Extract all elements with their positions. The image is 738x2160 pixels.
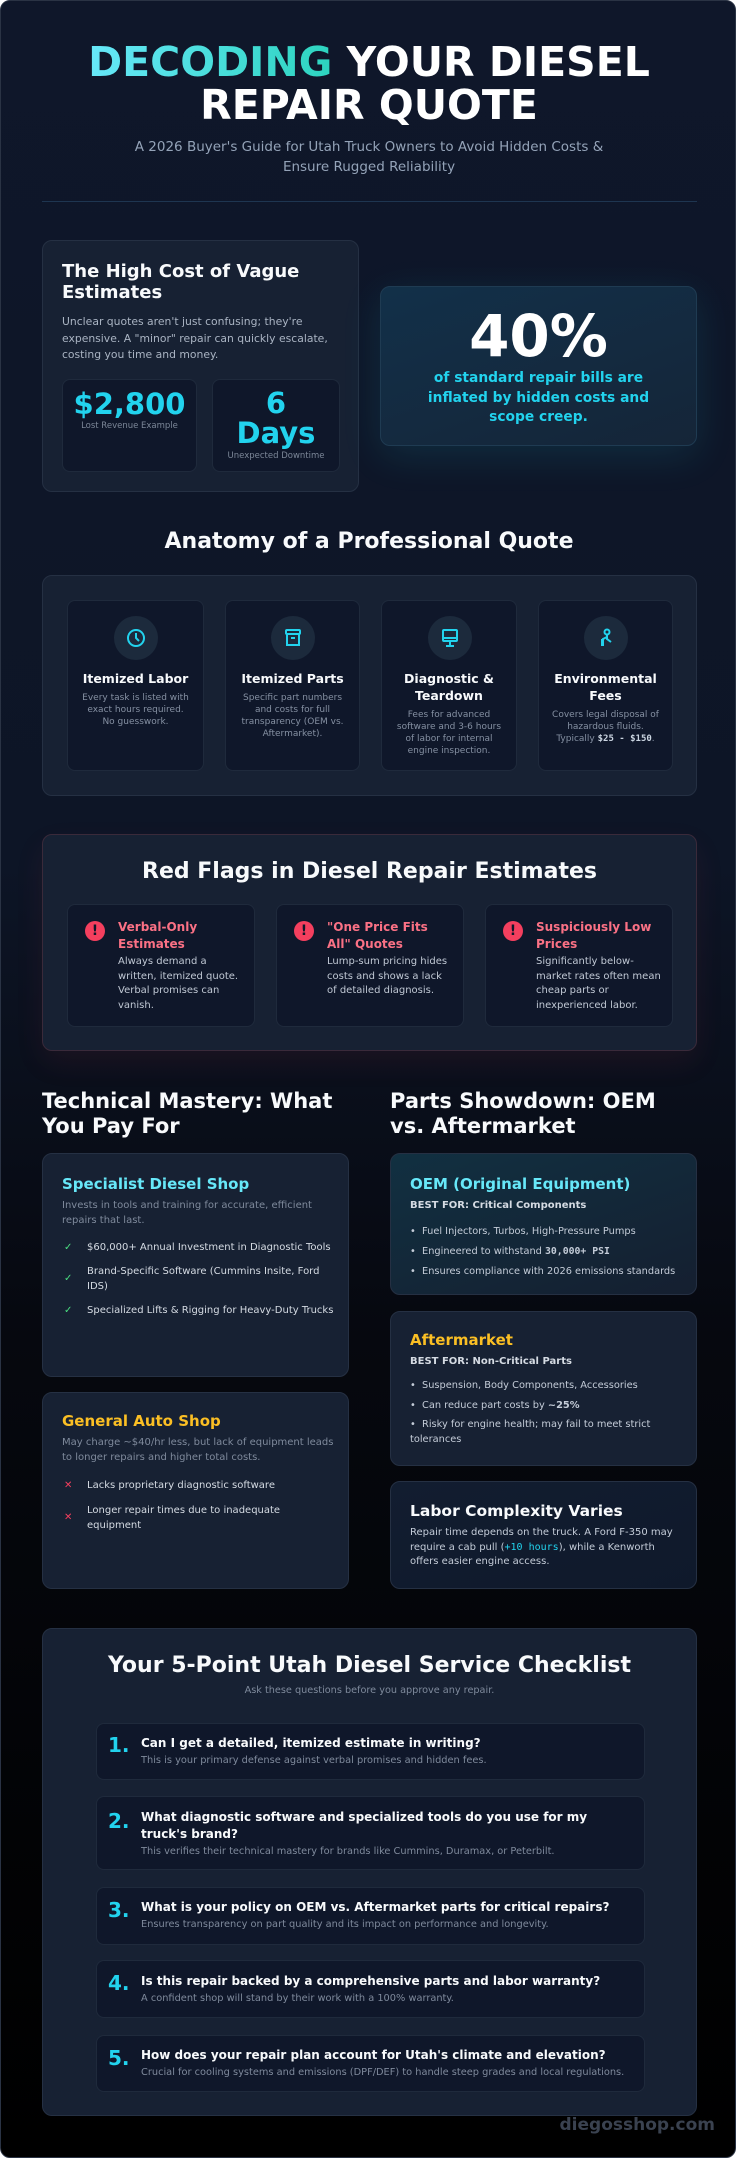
card: itemized parts: Aftermarket).: [263, 729, 322, 739]
cross items: [64, 1480, 280, 1530]
card: OEM: • Fuel Injectors, Turbos, High-Pressure Pumps: [410, 1226, 636, 1237]
card: verbal-only: [67, 904, 255, 1027]
card: diagnostic: Fees for advanced: [408, 710, 490, 720]
icon: clock: [114, 616, 158, 660]
card: one price: Lump-sum pricing hides: [327, 956, 447, 967]
card: specialist diesel shop: Invests in tools and training for accurate, efficient: [62, 1200, 312, 1211]
card: one price: of detailed diagnosis.: [327, 985, 434, 996]
card: diagnostic: Teardown: [415, 688, 483, 703]
card: verbal-only: Verbal-Only: [118, 920, 197, 934]
card: specialist diesel shop: repairs that last.: [62, 1214, 144, 1226]
item 1: [96, 1723, 645, 1780]
icon: alert: [503, 921, 523, 941]
card: OEM: OEM (Original Equipment): [410, 1175, 630, 1193]
stat: $2,800: $2,800: [74, 387, 185, 421]
card: labor complexity: offers easier engine access.: [410, 1556, 550, 1567]
subtitle: A 2026 Buyer's Guide for Utah Truck Owners to Avoid Hidden Costs &: [135, 139, 603, 155]
item 4: A confident shop will stand by their work with a 100% warranty.: [141, 1993, 454, 2004]
card: itemized labor: Itemized Labor: [83, 671, 188, 686]
checklist items: [64, 1242, 333, 1316]
card: OEM: [390, 1153, 697, 1295]
item 4: 4.: [108, 1971, 130, 1995]
item 3: 3.: [108, 1898, 130, 1922]
icon: alert: !: [510, 923, 516, 939]
checklist items: Brand-Specific Software (Cummins Insite, Ford: [87, 1266, 319, 1277]
panel: red flags: [42, 834, 697, 1051]
card: aftermarket: • Risky for engine health; may fail to meet strict: [410, 1419, 650, 1430]
subtitle: Ensure Rugged Reliability: [283, 159, 455, 175]
card: general auto shop: to longer repairs and higher total costs.: [62, 1452, 260, 1462]
heading: red flags: Red Flags in Diesel Repair Estimates: [142, 859, 597, 884]
checklist items: $60,000+ Annual Investment in Diagnostic Tools: [87, 1242, 331, 1253]
item 5: [96, 2035, 645, 2092]
card: specialist diesel shop: [42, 1153, 349, 1377]
card: diagnostic: Diagnostic &: [404, 671, 494, 686]
watermark: diegosshop.com: [560, 2115, 715, 2135]
heading: parts showdown: [390, 1089, 656, 1138]
card: environmental fees: hazardous fluids.: [567, 722, 644, 732]
card: aftermarket: tolerances: [410, 1434, 461, 1444]
heading: anatomy: Anatomy of a Professional Quote: [164, 529, 574, 554]
card: itemized labor: [67, 600, 204, 771]
card: diagnostic: software and 3-6 hours: [397, 722, 501, 732]
item 3: What is your policy on OEM vs. Aftermarket parts for critical repairs?: [141, 1900, 609, 1914]
card: diagnostic: engine inspection.: [408, 746, 490, 756]
card: itemized parts: transparency (OEM vs.: [241, 717, 344, 727]
card: itemized parts: [225, 600, 360, 771]
title: DECODING YOUR DIESEL: [88, 38, 650, 86]
icon: alert: [85, 921, 105, 941]
card: aftermarket: • Can reduce part costs by ~25%: [410, 1400, 580, 1410]
item 5: 5.: [108, 2046, 130, 2070]
icon: alert: [294, 921, 314, 941]
stat: $2,800: Lost Revenue Example: [81, 421, 178, 431]
card: environmental fees: Typically $25 - $150.: [556, 734, 655, 744]
cross items: ✕: [64, 1480, 72, 1491]
panel: anatomy: [42, 575, 697, 796]
card: labor complexity: Repair time depends on the truck. A Ford F-350 may: [410, 1527, 673, 1538]
icon: alert: !: [301, 923, 307, 939]
card: verbal-only: Verbal promises can: [118, 985, 219, 996]
card: low prices: inexperienced labor.: [536, 1000, 638, 1010]
card: aftermarket: [390, 1311, 697, 1466]
card: one price: All" Quotes: [327, 937, 403, 951]
card: OEM: BEST FOR: Critical Components: [410, 1200, 586, 1211]
card: specialist diesel shop: Specialist Diesel Shop: [62, 1175, 249, 1193]
item 4: Is this repair backed by a comprehensive parts and labor warranty?: [141, 1974, 600, 1988]
card: environmental fees: [538, 600, 673, 771]
panel heading: The High Cost of Vague Estimates: [62, 261, 299, 303]
cross items: ✕: [64, 1512, 72, 1523]
card: low prices: Prices: [536, 937, 577, 951]
card: general auto shop: May charge ~$40/hr less, but lack of equipment leads: [62, 1437, 334, 1448]
card: one price: costs and shows a lack: [327, 970, 442, 982]
callout: 40%: 40%: [469, 302, 608, 370]
card: general auto shop: [42, 1392, 349, 1589]
item 5: How does your repair plan account for Utah's climate and elevation?: [141, 2048, 606, 2062]
title: [88, 38, 650, 129]
card: aftermarket: • Suspension, Body Components, Accessories: [410, 1380, 638, 1391]
stat: 6 days: Unexpected Downtime: [228, 451, 324, 461]
checklist items: ✓: [64, 1242, 72, 1253]
card: itemized labor: exact hours required.: [87, 705, 184, 715]
card: low prices: Significantly below-: [536, 956, 634, 967]
panel body text: Unclear quotes aren't just confusing; they're expensive. A "minor" repair can quickly escalate, costing you time and money.: [62, 315, 328, 361]
checklist items: Specialized Lifts & Rigging for Heavy-Duty Trucks: [87, 1305, 333, 1316]
title: REPAIR QUOTE: [200, 81, 538, 129]
item 1: 1.: [108, 1733, 130, 1757]
card: environmental fees: Fees: [589, 688, 622, 703]
cross items: Longer repair times due to inadequate: [87, 1505, 280, 1516]
icon: box: [271, 616, 315, 660]
card: environmental fees: Covers legal disposal of: [552, 710, 659, 720]
card: itemized parts: and costs for full: [255, 705, 330, 715]
item 4: [96, 1960, 645, 2018]
item 3: Ensures transparency on part quality and its impact on performance and longevity.: [141, 1919, 549, 1930]
card: labor complexity: require a cab pull (+10 hours), while a Kenworth: [410, 1542, 655, 1552]
callout: 40%: of standard repair bills are inflated by hidden costs and scope creep.: [428, 370, 649, 425]
callout: 40%: [380, 286, 697, 446]
card: labor complexity: Labor Complexity Varies: [410, 1502, 623, 1520]
stat: 6 days: [212, 379, 340, 472]
stat: $2,800: [62, 379, 197, 472]
heading: technical mastery: Technical Mastery: What: [42, 1089, 332, 1113]
item 2: truck's brand?: [141, 1827, 238, 1841]
heading: checklist: Your 5-Point Utah Diesel Service Checklist: [108, 1653, 631, 1678]
card: one price: [276, 904, 464, 1027]
cross items: equipment: [87, 1520, 141, 1530]
item 1: Can I get a detailed, itemized estimate in writing?: [141, 1736, 481, 1750]
card: low prices: cheap parts or: [536, 985, 609, 996]
item 2: What diagnostic software and specialized tools do you use for my: [141, 1810, 587, 1824]
icon: alert: !: [92, 923, 98, 939]
card: diagnostic: of labor for internal: [405, 734, 493, 744]
item 2: 2.: [108, 1809, 130, 1833]
card: itemized labor: Every task is listed with: [82, 693, 189, 703]
subtitle: [134, 139, 603, 175]
card: low prices: Suspiciously Low: [536, 920, 651, 934]
card: itemized parts: Specific part numbers: [243, 693, 342, 703]
card: low prices: market rates often mean: [536, 970, 661, 982]
card: verbal-only: Always demand a: [118, 956, 207, 967]
heading: technical mastery: You Pay For: [42, 1114, 180, 1138]
card: verbal-only: written, itemized quote.: [118, 970, 238, 982]
item 3: [96, 1887, 645, 1945]
item 1: This is your primary defense against verbal promises and hidden fees.: [141, 1755, 487, 1766]
heading: parts showdown: Parts Showdown: OEM: [390, 1089, 656, 1113]
icon: person: [584, 616, 628, 660]
card: OEM: • Ensures compliance with 2026 emissions standards: [410, 1266, 675, 1277]
panel: checklist: Ask these questions before you approve any repair.: [245, 1685, 494, 1696]
item 2: This verifies their technical mastery for brands like Cummins, Duramax, or Peterbilt.: [141, 1846, 555, 1857]
item 5: Crucial for cooling systems and emissions (DPF/DEF) to handle steep grades and local regulations.: [141, 2067, 624, 2078]
card: verbal-only: vanish.: [118, 1000, 154, 1010]
card: labor complexity: [390, 1481, 697, 1589]
panel: checklist: [42, 1628, 697, 2116]
icon: monitor: [428, 616, 472, 660]
checklist items: ✓: [64, 1273, 72, 1284]
stat: 6 days: 6: [266, 386, 286, 420]
card: general auto shop: General Auto Shop: [62, 1412, 221, 1430]
card: environmental fees: Environmental: [554, 671, 657, 686]
card: itemized parts: Itemized Parts: [241, 671, 344, 686]
card: OEM: • Engineered to withstand 30,000+ PSI: [410, 1246, 610, 1257]
stat: 6 days: Days: [237, 416, 315, 450]
card: verbal-only: Estimates: [118, 937, 185, 951]
card: aftermarket: BEST FOR: Non-Critical Parts: [410, 1356, 572, 1367]
card: diagnostic: [381, 600, 517, 771]
cross items: Lacks proprietary diagnostic software: [87, 1480, 275, 1491]
heading: parts showdown: vs. Aftermarket: [390, 1114, 576, 1138]
card: aftermarket: Aftermarket: [410, 1331, 513, 1349]
card: low prices: [485, 904, 673, 1027]
card: one price: "One Price Fits: [327, 920, 428, 934]
item 2: [96, 1796, 645, 1870]
heading: technical mastery: [42, 1089, 332, 1138]
checklist items: IDS): [87, 1280, 108, 1292]
checklist items: ✓: [64, 1305, 72, 1316]
card: itemized labor: No guesswork.: [102, 717, 169, 727]
panel: high cost of vague estimates: [42, 240, 359, 492]
